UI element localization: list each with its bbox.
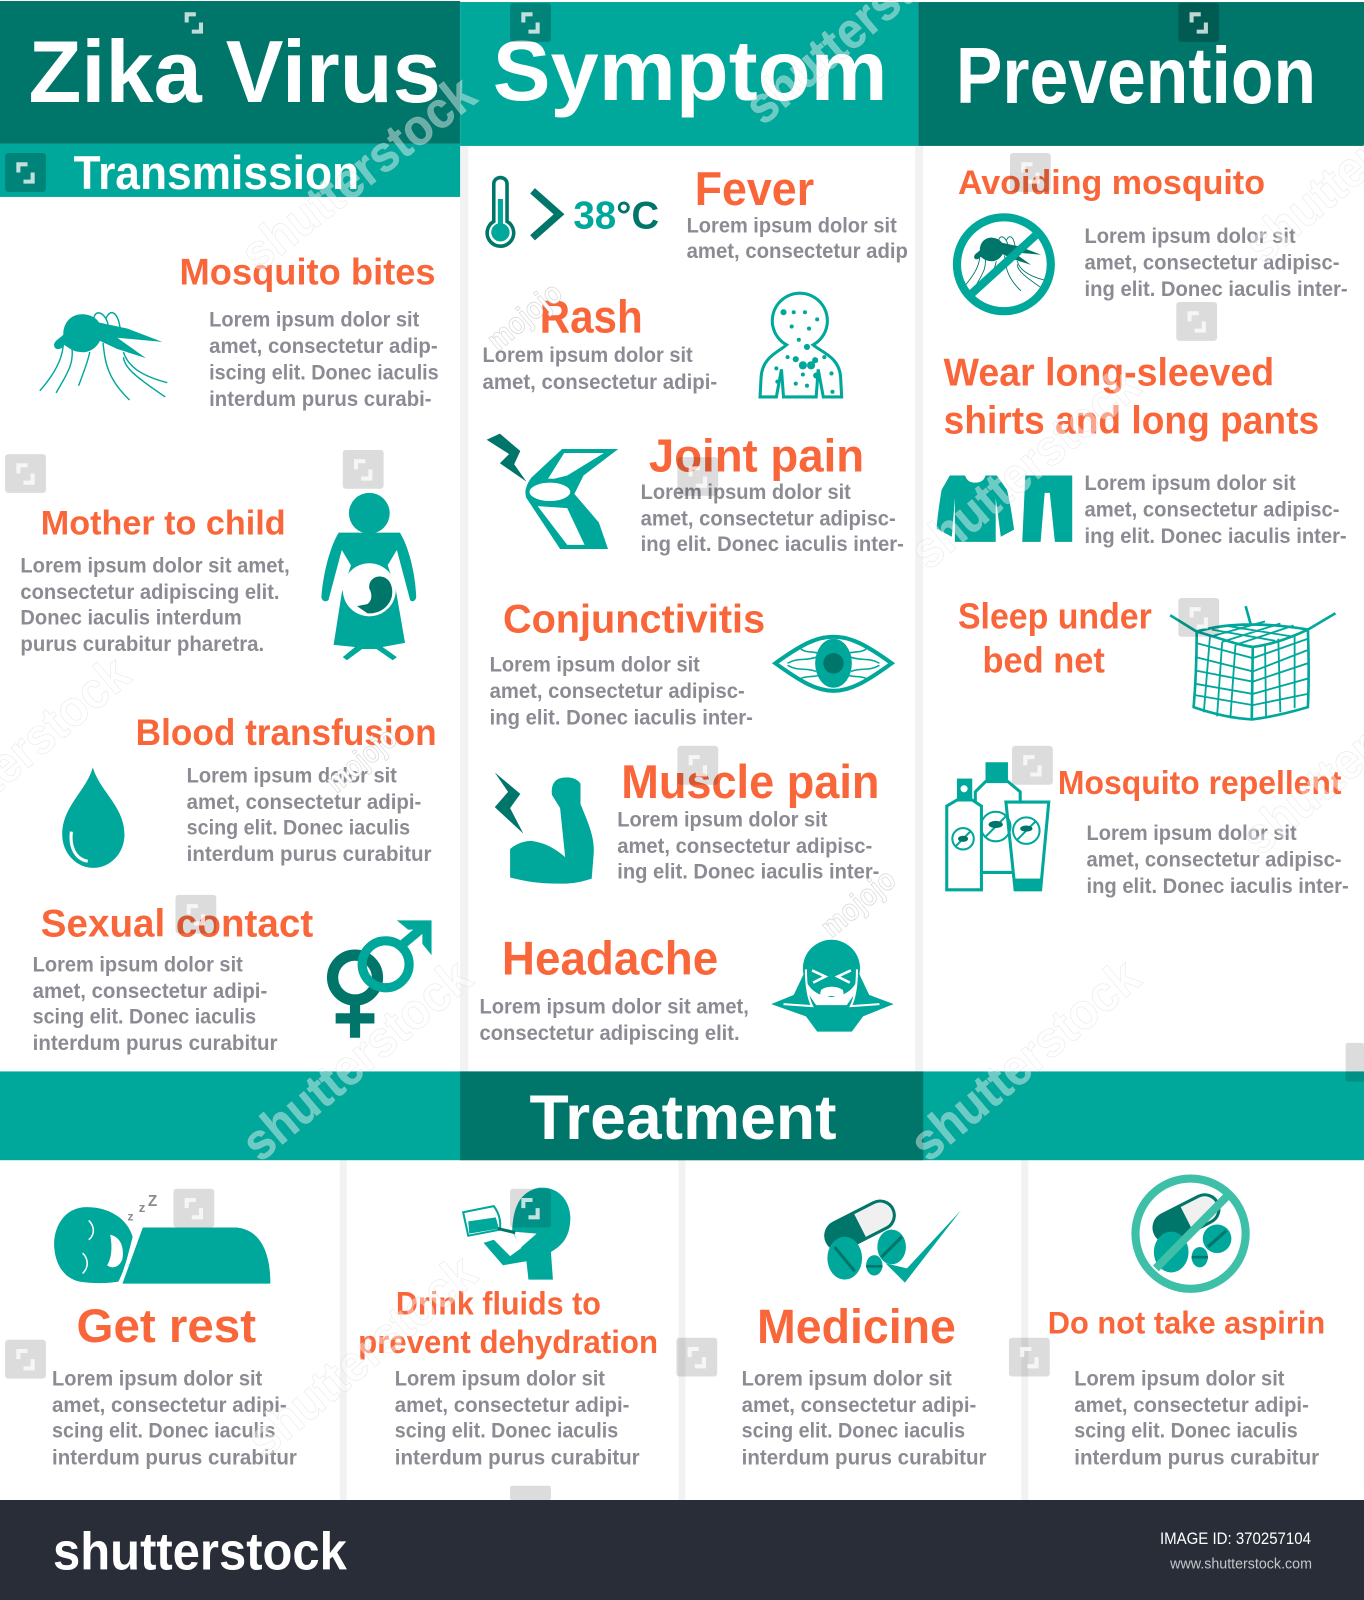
item: get rest [52,1193,297,1469]
item: mother to child: consectetur adipiscing elit. [20,580,280,604]
item: blood transfusion: scing elit. Donec iaculis [187,816,410,840]
icon: aching arm [495,772,594,884]
icon: thermometer above 38°C: °C [616,195,659,238]
item: no aspirin: amet, consectetur adipi- [1074,1393,1309,1417]
item: fever: Lorem ipsum dolor sit [687,214,897,238]
item: rash: Rash [540,291,643,343]
item: drink fluids: Lorem ipsum dolor sit [395,1367,605,1391]
icon: red eye [775,637,892,691]
item: mosquito repellent: Mosquito repellent [1058,765,1342,802]
item: no aspirin [1048,1179,1325,1469]
panel: symptoms [479,163,908,1045]
item: long-sleeved clothing: shirts and long pants [944,400,1319,443]
item: mosquito bites [40,252,439,411]
watermark overlay: shutterstock [230,64,486,282]
item: mother to child: Lorem ipsum dolor sit amet, [20,553,290,577]
watermark overlay: mojojo [481,276,569,357]
item: conjunctivitis: Lorem ipsum dolor sit [490,652,700,676]
item: mosquito repellent [947,762,1349,898]
item: mosquito repellent: Lorem ipsum dolor sit [1087,821,1297,845]
header: Symptom: Symptom [493,23,888,119]
icon: thermometer above 38°C [487,178,659,246]
watermark overlay: shutterstock [899,355,1151,580]
item: long-sleeved clothing: Wear long-sleeved [944,352,1274,395]
icon: sleeping person [54,1193,270,1284]
icon: blood drop [62,767,124,868]
item: fever [487,163,908,263]
item: drink fluids: amet, consectetur adipi- [395,1393,629,1417]
item: medicine: Lorem ipsum dolor sit [742,1367,952,1391]
item: sexual contact: amet, consectetur adipi- [33,979,267,1003]
item: drink fluids [358,1188,658,1469]
item: muscle pain: Lorem ipsum dolor sit [617,808,827,832]
item: mosquito bites: interdum purus curabi- [209,387,432,411]
logo: shutterstock: shutterstock [53,1522,347,1581]
item: sexual contact [33,903,432,1055]
footer bar [0,1500,1364,1600]
item: rash: Lorem ipsum dolor sit [483,343,693,367]
item: joint pain [487,429,904,556]
sub-header: Transmission: Transmission [73,147,359,199]
item: mosquito bites: Lorem ipsum dolor sit [209,308,419,332]
item: drink fluids: Drink fluids to [396,1284,601,1321]
item: no aspirin: Do not take aspirin [1048,1305,1325,1341]
item: no aspirin: interdum purus curabitur [1074,1445,1319,1469]
icon: prohibited pills [1135,1179,1246,1289]
item: bed net [958,597,1335,719]
item: medicine: amet, consectetur adipi- [742,1393,976,1417]
item: muscle pain: amet, consectetur adipisc- [617,834,872,858]
item: medicine [742,1196,987,1469]
item: drink fluids: interdum purus curabitur [395,1445,640,1469]
item: medicine: interdum purus curabitur [742,1445,987,1469]
item: conjunctivitis: amet, consectetur adipisc- [490,679,745,703]
item: joint pain: Lorem ipsum dolor sit [641,480,851,504]
item: blood transfusion: interdum purus curabitur [187,842,432,866]
item: mother to child [20,493,416,660]
item: joint pain: Joint pain [649,429,864,481]
item: get rest: Get rest [77,1300,256,1352]
footer: image id [1160,1530,1312,1572]
item: long-sleeved clothing: ing elit. Donec iaculis inter- [1084,524,1347,548]
item: fever: Fever [695,163,814,215]
icon: sleeping person: Z [148,1193,157,1210]
icon: pregnant woman [321,493,416,660]
watermark overlay: shutterstock [899,947,1151,1172]
icon: pills with check mark [821,1196,961,1283]
watermark overlay: mojojo [814,862,902,944]
item: muscle pain: ing elit. Donec iaculis inter- [617,860,879,884]
item: long-sleeved clothing: Lorem ipsum dolor sit [1084,471,1296,495]
item: mosquito repellent: amet, consectetur adipisc- [1087,847,1342,871]
item: avoiding mosquito: amet, consectetur adipisc- [1084,250,1340,274]
item: medicine: scing elit. Donec iaculis [742,1419,965,1443]
item: blood transfusion: Lorem ipsum dolor sit [187,764,397,788]
icon: shirt and pants [937,476,1072,542]
item: bed net: Sleep under [958,597,1152,637]
item: mother to child: Donec iaculis interdum [20,605,242,629]
icon: repellent bottles and tube [947,762,1049,891]
item: headache: Lorem ipsum dolor sit amet, [479,994,749,1018]
item: get rest: Lorem ipsum dolor sit [52,1367,262,1391]
item: fever: amet, consectetur adip [687,239,908,263]
item: avoiding mosquito: ing elit. Donec iaculis inter- [1084,277,1348,301]
item: mosquito bites: Mosquito bites [180,252,436,293]
header: Zika Virus: Zika Virus [29,23,441,121]
item: blood transfusion: Blood transfusion [136,712,437,753]
item: avoiding mosquito [957,164,1348,311]
icon: no mosquito [957,217,1051,311]
item: avoiding mosquito: Avoiding mosquito [958,164,1265,202]
item: get rest: interdum purus curabitur [52,1445,297,1469]
icon: sleeping person: z [128,1209,134,1223]
panel: treatment [52,1179,1325,1469]
panel: transmission [20,252,439,1055]
item: long-sleeved clothing: amet, consectetur adipisc- [1084,497,1340,521]
icon: bed net [1170,606,1335,719]
sub-header: Transmission [0,144,460,199]
footer: image id: www.shutterstock.com [1169,1556,1312,1572]
header: Treatment [0,1071,1364,1160]
item: long-sleeved clothing [937,352,1347,548]
item: sexual contact: interdum purus curabitur [33,1031,277,1055]
item: headache [479,932,894,1045]
item: get rest: scing elit. Donec iaculis [52,1419,276,1443]
item: mosquito bites: iscing elit. Donec iaculis [209,361,439,385]
header: Prevention: Prevention [956,31,1316,120]
item: get rest: amet, consectetur adipi- [52,1393,287,1417]
watermark overlay: shutterstock [231,947,483,1172]
header: Symptom [460,2,918,146]
header: Zika Virus [0,1,460,144]
footer: image id: IMAGE ID: 370257104 [1160,1530,1311,1548]
icon: person drinking [463,1188,570,1280]
watermark overlay: shutterstock [236,1243,488,1468]
icon: person with headache [771,940,894,1032]
item: headache: Headache [502,932,718,984]
item: headache: consectetur adipiscing elit. [479,1021,740,1045]
header: Treatment: Treatment [529,1083,837,1153]
item: blood transfusion [62,712,437,868]
item: bed net: bed net [982,640,1105,680]
item: mother to child: Mother to child [41,505,286,543]
icon: mosquito [40,313,167,400]
icon: child with rash [760,293,842,397]
item: rash [483,291,842,397]
icon: gender symbols [333,920,432,1038]
item: drink fluids: scing elit. Donec iaculis [395,1419,618,1443]
item: conjunctivitis: ing elit. Donec iaculis inter- [490,705,753,729]
item: joint pain: ing elit. Donec iaculis inter- [641,532,904,556]
header: Prevention [918,2,1364,146]
item: mother to child: purus curabitur pharetra. [20,632,264,656]
item: no aspirin: scing elit. Donec iaculis [1074,1419,1298,1443]
icon: thermometer above 38°C: 38 [573,195,616,238]
item: sexual contact: Lorem ipsum dolor sit [33,952,243,976]
item: drink fluids: prevent dehydration [358,1323,658,1360]
item: blood transfusion: amet, consectetur adipi- [187,790,421,814]
item: mosquito bites: amet, consectetur adip- [209,334,438,358]
icon: sleeping person: z [139,1200,146,1215]
item: muscle pain: Muscle pain [621,756,879,808]
item: sexual contact: scing elit. Donec iaculis [33,1004,256,1028]
item: no aspirin: Lorem ipsum dolor sit [1074,1367,1284,1391]
item: conjunctivitis [490,598,892,729]
item: mosquito repellent: ing elit. Donec iaculis inter- [1087,874,1349,898]
item: avoiding mosquito: Lorem ipsum dolor sit [1084,224,1296,248]
item: muscle pain [495,756,879,884]
item: medicine: Medicine [757,1301,956,1354]
item: joint pain: amet, consectetur adipisc- [641,507,896,531]
watermark overlay: mojojo [319,721,404,799]
item: rash: amet, consectetur adipi- [483,370,717,394]
item: sexual contact: Sexual contact [41,903,313,946]
icon: aching knee [487,434,618,549]
panel: prevention [937,164,1349,898]
item: conjunctivitis: Conjunctivitis [503,598,765,642]
